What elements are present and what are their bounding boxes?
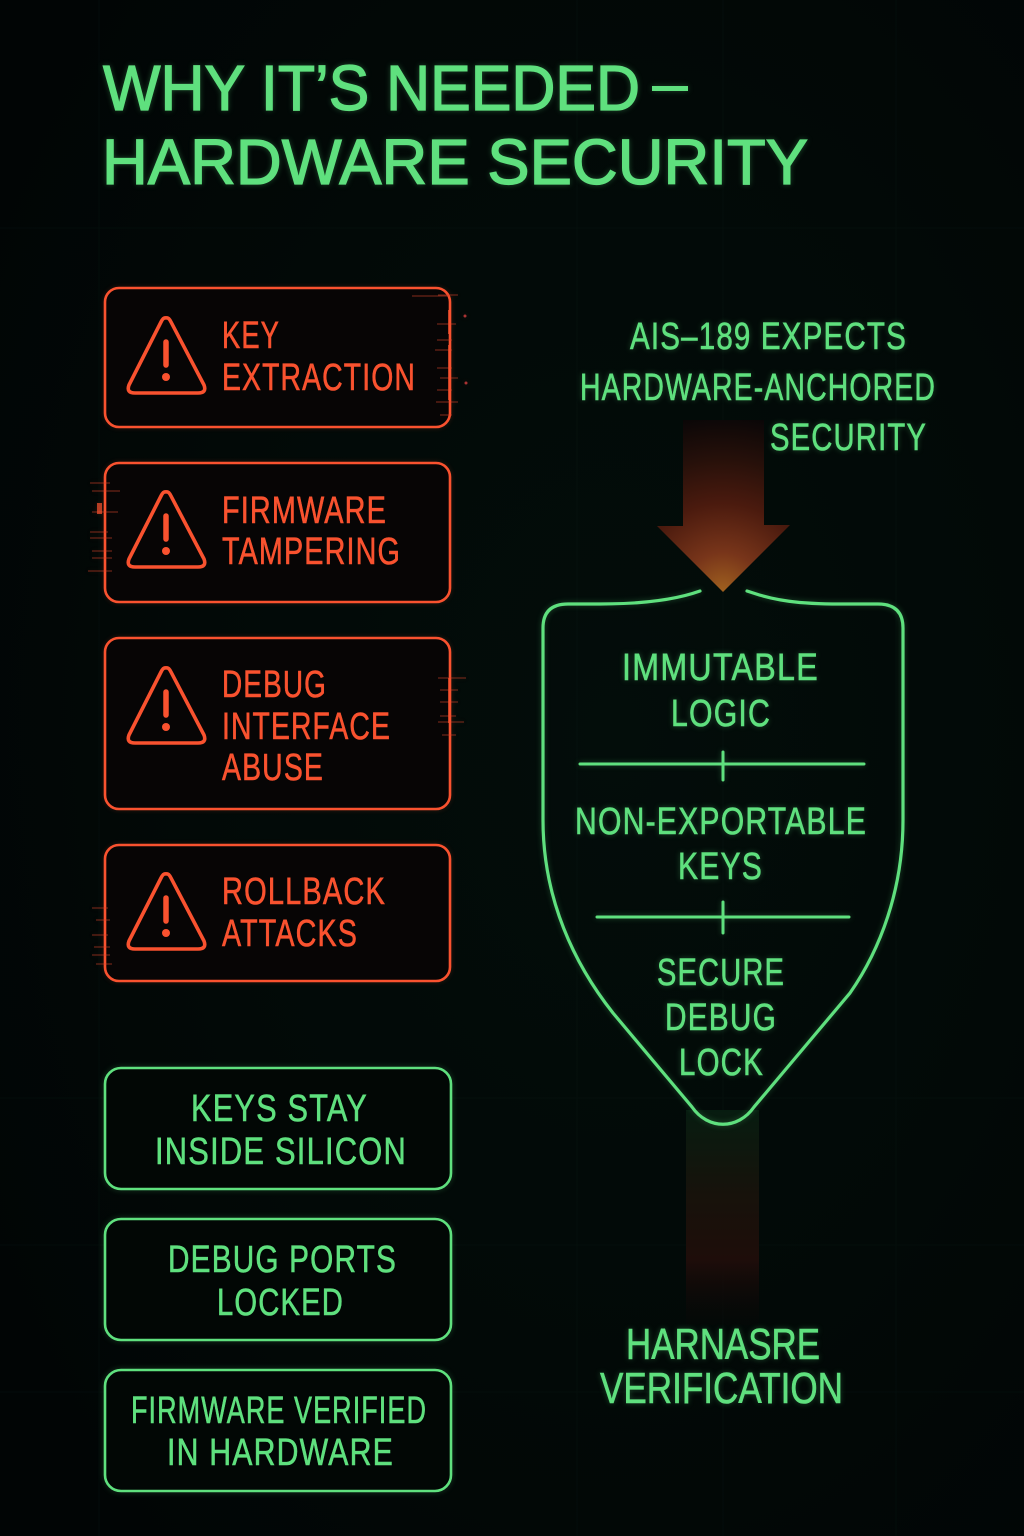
icon: warning triangle (128, 668, 205, 743)
panel: threat rollback attacks: ROLLBACK (222, 871, 386, 913)
panel: threat rollback attacks: ATTACKS (222, 913, 358, 955)
icon: warning triangle (128, 874, 205, 949)
text block: hardware verification (600, 1320, 843, 1413)
shield: KEYS (678, 846, 763, 888)
title (102, 52, 808, 198)
panel: debug ports locked: LOCKED (217, 1282, 344, 1324)
icon: warning triangle (128, 318, 205, 393)
panel: firmware verified in hardware (105, 1370, 451, 1491)
panel: firmware verified in hardware: IN HARDWARE (167, 1432, 394, 1474)
text block: hardware verification: HARNASRE (626, 1320, 820, 1369)
panel: threat firmware tampering: FIRMWARE (222, 490, 387, 532)
shield (543, 591, 903, 1124)
arrow: stem below shield (686, 1110, 759, 1325)
panel: keys stay inside silicon: INSIDE SILICON (155, 1131, 407, 1173)
panel: debug ports locked (105, 1219, 451, 1340)
panel: keys stay inside silicon: KEYS STAY (191, 1088, 368, 1130)
shield: LOCK (679, 1042, 764, 1084)
icon: warning triangle (128, 492, 205, 567)
arrow: down into shield (657, 420, 790, 592)
title: HARDWARE SECURITY (102, 126, 808, 198)
shield: IMMUTABLE (622, 647, 819, 689)
shield: SECURE (657, 952, 785, 994)
text block: AIS-189 expectation: SECURITY (770, 417, 927, 459)
panel: threat debug interface abuse (105, 638, 466, 809)
panel: firmware verified in hardware: FIRMWARE VERIFIED (131, 1390, 427, 1432)
panel: keys stay inside silicon (105, 1068, 451, 1189)
title: WHY IT’S NEEDED (103, 52, 640, 124)
text block: hardware verification: VERIFICATION (600, 1364, 843, 1413)
shield: NON-EXPORTABLE (575, 801, 867, 843)
panel: threat debug interface abuse: ABUSE (222, 747, 324, 789)
panel: threat key extraction: KEY (222, 315, 280, 357)
shield: LOGIC (671, 693, 771, 735)
panel: threat rollback attacks (92, 845, 450, 981)
shield: DEBUG (665, 997, 777, 1039)
panel: threat debug interface abuse: INTERFACE (222, 706, 391, 748)
text block: AIS-189 expectation: AIS–189 EXPECTS (630, 316, 907, 358)
panel: threat key extraction: EXTRACTION (222, 357, 416, 399)
panel: threat firmware tampering (88, 463, 450, 602)
panel: debug ports locked: DEBUG PORTS (168, 1239, 397, 1281)
panel: threat firmware tampering: TAMPERING (222, 531, 401, 573)
panel: threat debug interface abuse: DEBUG (222, 664, 327, 706)
text block: AIS-189 expectation (580, 316, 936, 459)
panel: threat key extraction (105, 288, 468, 427)
